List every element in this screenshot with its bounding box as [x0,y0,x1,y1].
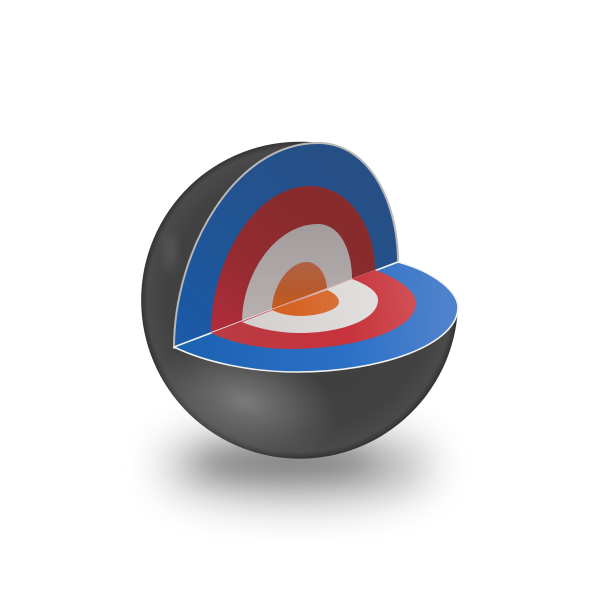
floor layer: white [242,279,378,333]
floor layer: orange core [272,290,339,316]
illustration: layered sphere cutaway [141,142,458,528]
floor layer: red [211,270,416,349]
cut wall: vertical section [174,143,398,348]
wall layer: orange core [272,262,327,310]
shell shading [166,238,323,452]
sphere shell [130,142,470,470]
wall layer: white [242,224,352,322]
cut floor: horizontal section [174,262,458,372]
wall layer: red [211,186,375,333]
shell highlight: left side [167,232,175,272]
wall layer: blue [174,143,398,348]
floor layer: blue [174,262,458,372]
shell base [141,142,458,459]
ground shadow [162,430,432,502]
shell highlight: lower front [166,357,323,452]
